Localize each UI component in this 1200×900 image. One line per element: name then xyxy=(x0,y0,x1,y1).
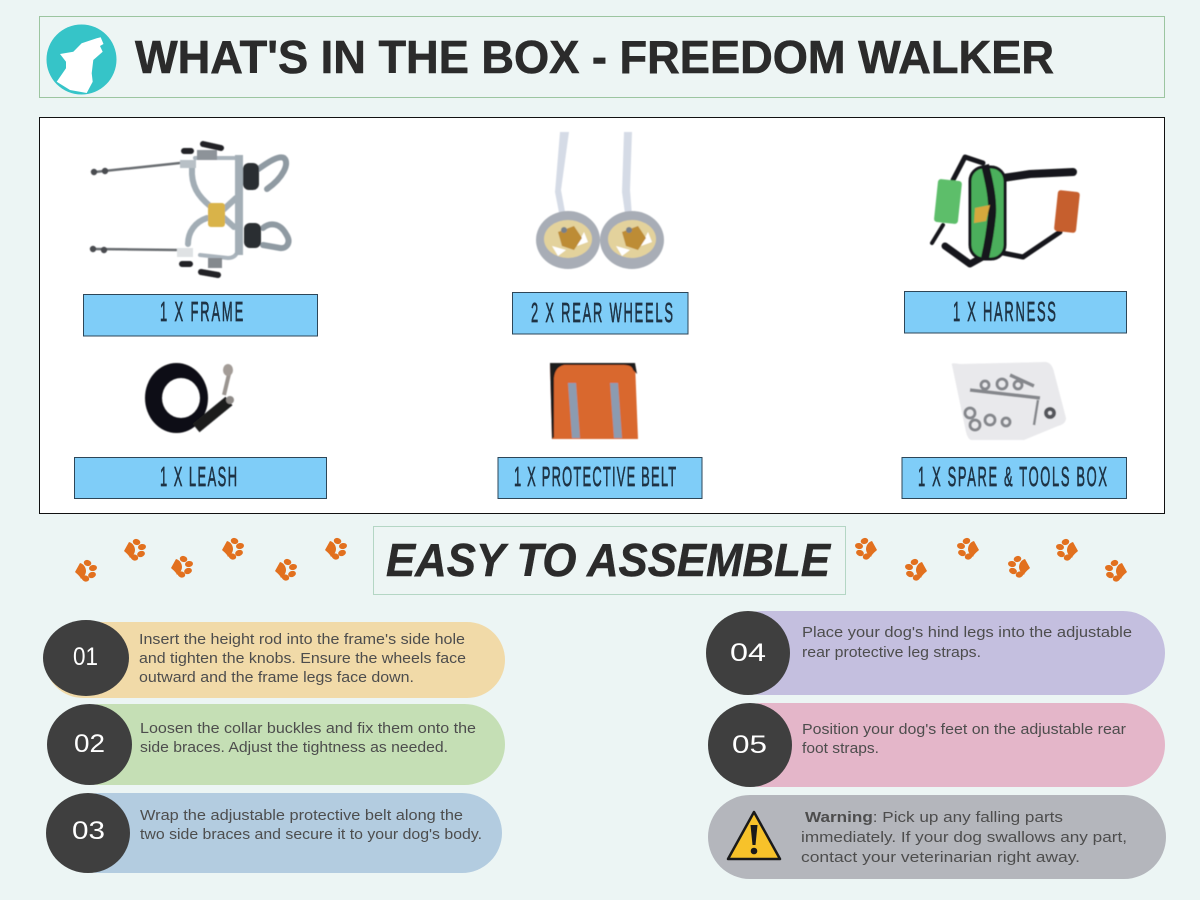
icon: howling wolf logo xyxy=(46,24,116,94)
warning callout: Warning : Pick up any falling parts xyxy=(805,809,1063,826)
step 01: 01 xyxy=(73,643,98,671)
step 03 xyxy=(46,793,502,873)
image: harness xyxy=(932,157,1080,264)
image: protective belt xyxy=(550,363,638,439)
panel: box contents xyxy=(40,118,1164,514)
title: WHAT'S IN THE BOX - FREEDOM WALKER xyxy=(135,31,1054,83)
label: spare and tools box: 1 X SPARE & TOOLS BOX xyxy=(918,462,1107,492)
label: harness: 1 X HARNESS xyxy=(953,297,1056,327)
label: frame: 1 X FRAME xyxy=(160,297,243,327)
label: spare and tools box xyxy=(902,458,1126,498)
step 03: Wrap the adjustable protective belt along the xyxy=(140,807,463,824)
label: rear wheels: 2 X REAR WHEELS xyxy=(531,298,673,328)
warning callout xyxy=(708,795,1166,879)
icon: warning triangle xyxy=(728,812,780,859)
step 03: 03 xyxy=(72,817,105,845)
warning callout: immediately. If your dog swallows any part, xyxy=(801,829,1127,846)
label: frame xyxy=(84,294,318,336)
step 05: foot straps. xyxy=(802,740,879,757)
step 01: Insert the height rod into the frame's side hole xyxy=(139,631,465,648)
warning callout: contact your veterinarian right away. xyxy=(801,849,1080,866)
step 04: 04 xyxy=(730,639,766,667)
label: protective belt: 1 X PROTECTIVE BELT xyxy=(514,462,676,492)
step 03: two side braces and secure it to your dog's body. xyxy=(140,826,482,843)
image: spare parts and tools box xyxy=(952,362,1066,440)
paw prints: right xyxy=(855,537,1127,583)
label: harness xyxy=(904,292,1126,333)
step 04: Place your dog's hind legs into the adjustable xyxy=(802,624,1132,641)
step 02: Loosen the collar buckles and fix them onto the xyxy=(140,720,476,737)
image: leash xyxy=(145,363,234,433)
step 04: rear protective leg straps. xyxy=(802,644,981,661)
step 05: 05 xyxy=(732,731,767,759)
image: walker frame xyxy=(90,144,288,275)
label: leash: 1 X LEASH xyxy=(160,462,237,492)
section heading: easy to assemble: EASY TO ASSEMBLE xyxy=(386,534,831,586)
step 05 xyxy=(708,703,1165,787)
image: rear wheels xyxy=(536,132,664,269)
step 01 xyxy=(43,620,505,698)
step 01: outward and the frame legs face down. xyxy=(139,669,414,686)
step 02: side braces. Adjust the tightness as needed. xyxy=(140,739,448,756)
label: rear wheels xyxy=(512,292,688,334)
header banner xyxy=(40,16,1164,98)
paw prints: left xyxy=(75,537,347,583)
step 04 xyxy=(706,611,1165,695)
step 05: Position your dog's feet on the adjustable rear xyxy=(802,721,1126,738)
label: leash xyxy=(74,458,326,498)
step 01: and tighten the knobs. Ensure the wheels face xyxy=(139,650,466,667)
label: protective belt xyxy=(498,458,702,498)
step 02: 02 xyxy=(74,730,105,758)
step 02 xyxy=(47,704,505,785)
